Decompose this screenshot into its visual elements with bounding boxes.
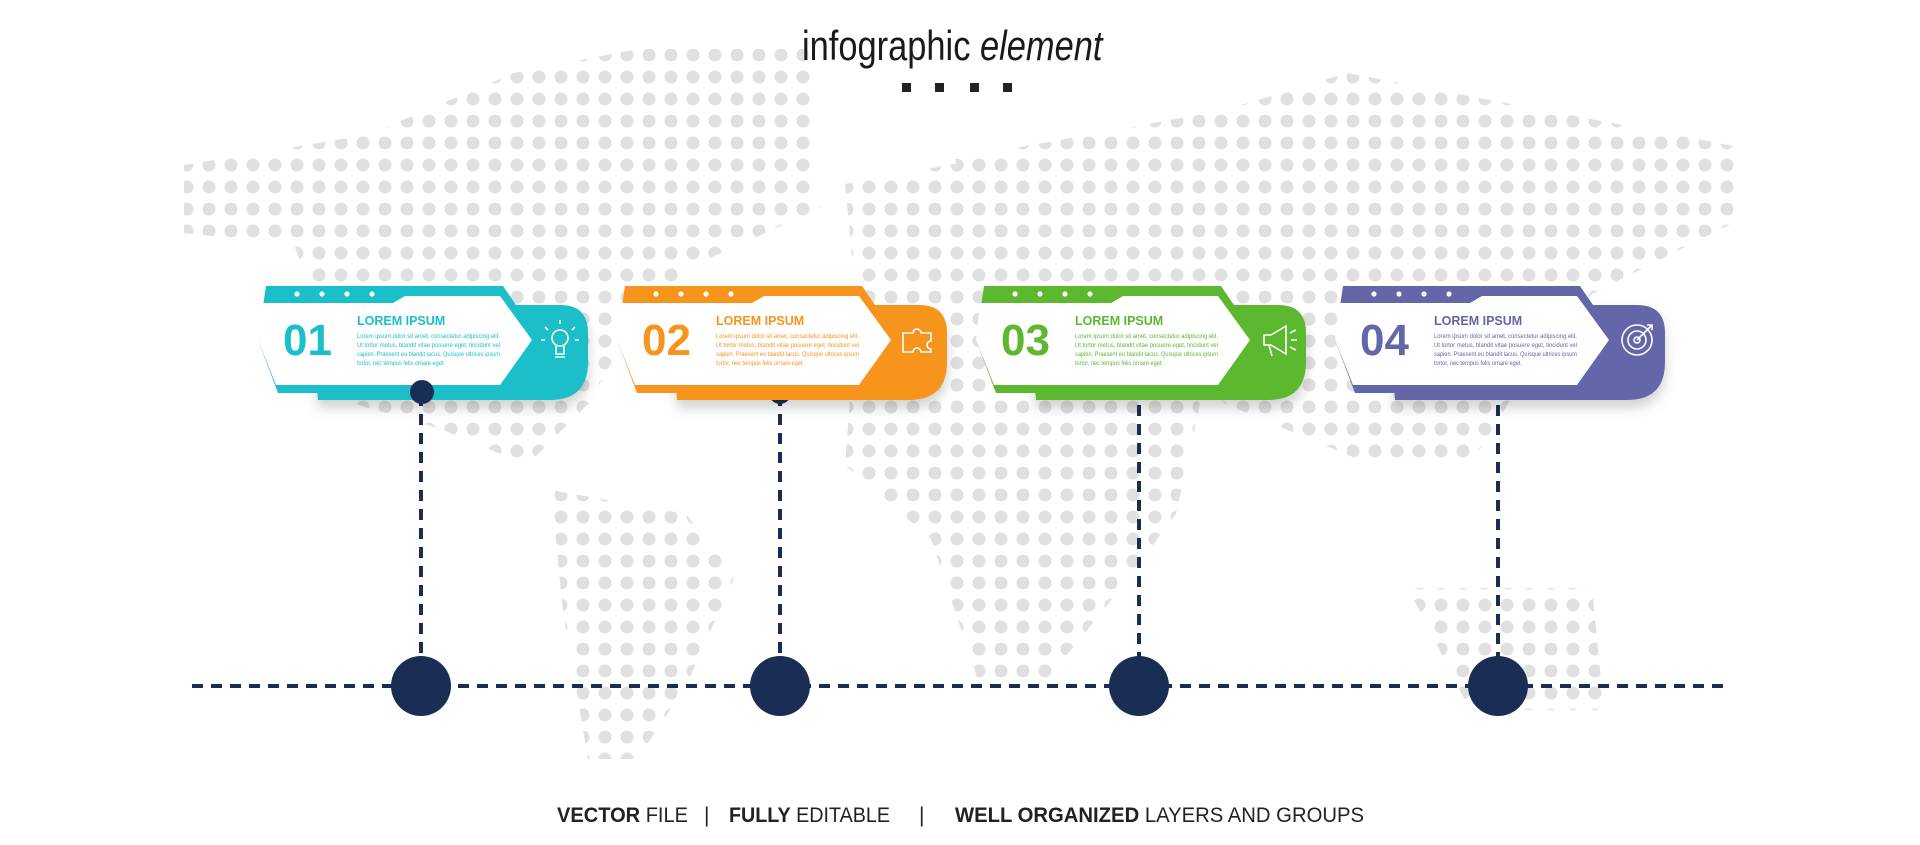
icon: target [1622,325,1652,355]
card 02: 02 [642,316,691,365]
footer: | [919,804,924,827]
connectors [421,395,1498,660]
title: infographic element [802,23,1104,70]
card 04 [1335,286,1665,400]
icon: light bulb [541,320,579,357]
world dot map background [184,49,1739,759]
card 03: 03 [1001,316,1050,365]
icon: megaphone [1264,326,1297,356]
footer: | [704,804,709,827]
footer: WELL ORGANIZED LAYERS AND GROUPS [955,804,1364,827]
card 01: 01 [283,316,332,365]
icon: puzzle [903,329,931,352]
footer: VECTOR FILE [557,804,688,827]
card 01 [258,286,588,400]
card 04: 04 [1360,316,1409,365]
footer: FULLY EDITABLE [729,804,890,827]
timeline dashed line [192,684,1727,688]
card 03 [976,286,1306,400]
footer [557,804,1364,827]
card 02 [617,286,947,400]
title [802,23,1104,92]
timeline nodes [391,656,1528,716]
